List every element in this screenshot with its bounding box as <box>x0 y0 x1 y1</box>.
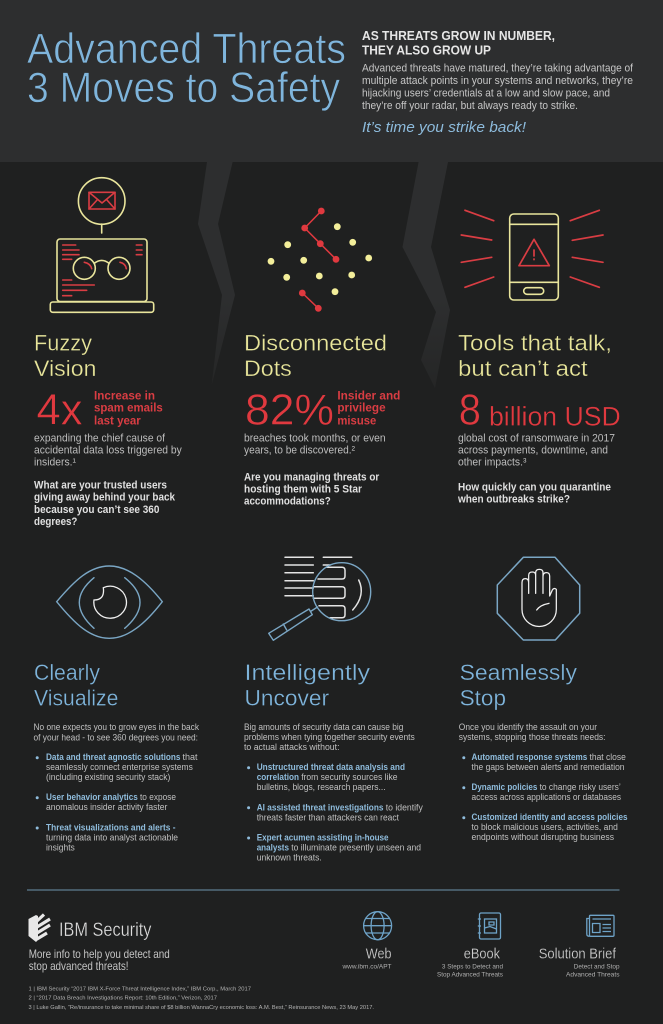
body text: insiders.¹ <box>34 457 76 469</box>
bullet: data and threat agnostic solutions: Data and threat agnostic solutions <box>46 752 180 762</box>
stat: 82%: misuse <box>337 414 377 427</box>
header intro text <box>362 62 634 112</box>
intro text: No one expects you to grow eyes in the back <box>34 722 199 732</box>
stat: 82%: Insider and <box>337 389 400 402</box>
footnotes: 1 | IBM Security “2017 IBM X-Force Threat Intelligence Index,” IBM Corp., March 2017 <box>28 986 251 992</box>
icon: eye <box>57 566 162 638</box>
bullet: automated response systems <box>462 752 626 772</box>
question: Are you managing threats or <box>244 471 380 483</box>
heading: Tools that talk, <box>458 331 612 356</box>
body text: across payments, downtime, and <box>458 445 608 457</box>
header subheading: THEY ALSO GROW UP <box>362 42 491 58</box>
bullet: data and threat agnostic solutions: (including existing security stack) <box>46 772 170 782</box>
question: How quickly can you quarantine <box>458 482 611 494</box>
icon: stop hand in octagon <box>497 557 580 640</box>
header intro text: multiple attack points in your systems and networks, they’re <box>362 75 633 87</box>
body text: accidental data loss triggered by <box>34 445 182 457</box>
bullet: user behavior analytics <box>36 792 176 812</box>
bullet: dynamic policies: to change risky users’ <box>540 782 621 792</box>
panel: disconnected dots <box>244 208 400 508</box>
panel: fuzzy vision <box>34 178 182 528</box>
heading: Stop <box>460 685 506 710</box>
heading: Fuzzy <box>34 331 92 356</box>
heading <box>34 331 96 381</box>
question <box>34 480 176 528</box>
bullet: unstructured threat data analysis: from security sources like <box>301 772 398 782</box>
bullet: threat visualizations and alerts: turning data into analyst actionable <box>46 832 178 842</box>
stat: 8 billion USD: 8 <box>459 385 481 434</box>
heading: Dots <box>244 356 292 381</box>
bullet: dynamic policies: Dynamic policies <box>472 782 537 792</box>
ibm security logo <box>28 914 152 942</box>
heading: Seamlessly <box>460 660 577 685</box>
bullet: customized identity and access policies: endpoints without disrupting business <box>472 832 614 842</box>
bullet: unstructured threat data analysis <box>247 762 405 792</box>
title: Advanced Threats <box>27 26 346 73</box>
body text: global cost of ransomware in 2017 <box>458 432 615 444</box>
question <box>244 471 380 508</box>
icon: globe <box>364 912 392 940</box>
bullet: ai assisted threat investigations: threats faster than attackers can react <box>257 812 399 822</box>
bullet: user behavior analytics: User behavior analytics <box>46 792 138 802</box>
bullet: dynamic policies: access across applications or databases <box>472 792 621 802</box>
bullet: data and threat agnostic solutions: that <box>182 752 198 762</box>
question: degrees? <box>34 516 77 528</box>
footer tagline <box>29 947 170 973</box>
stat: 8 billion USD: billion USD <box>489 402 621 432</box>
footer tagline: More info to help you detect and <box>29 947 170 961</box>
link: solution brief <box>539 915 620 978</box>
bullet: customized identity and access policies: Customized identity and access policies <box>472 812 628 822</box>
header subheading <box>362 28 555 58</box>
panel: tools that talk <box>457 210 621 506</box>
link: ebook: Stop Advanced Threats <box>437 971 504 978</box>
heading <box>460 660 577 710</box>
question: giving away behind your back <box>34 492 176 504</box>
bullet: unstructured threat data analysis: Unstructured threat data analysis and <box>257 762 405 772</box>
bullet: expert acumen <box>247 832 421 862</box>
panel: seamlessly stop <box>459 557 628 842</box>
icon: connected dots <box>268 208 372 312</box>
footnotes <box>28 986 374 1011</box>
heading <box>34 660 118 710</box>
footer tagline: stop advanced threats! <box>29 959 129 973</box>
link: ebook <box>437 913 504 978</box>
bullet: threat visualizations and alerts: insights <box>46 842 75 852</box>
link: web <box>342 912 392 971</box>
bullet: user behavior analytics: to expose <box>140 792 176 802</box>
link: ebook: 3 Steps to Detect and <box>442 964 503 971</box>
bullet: threat visualizations and alerts <box>36 822 178 852</box>
ibm security logo: IBM Security <box>59 920 152 941</box>
intro text: of your head - to see 360 degrees you need: <box>34 732 198 742</box>
link: web: Web <box>366 946 392 963</box>
link: solution brief: Advanced Threats <box>566 971 620 978</box>
bullet: data and threat agnostic solutions <box>36 752 198 782</box>
header panel <box>0 0 663 162</box>
stat: 8 billion USD <box>459 385 621 434</box>
heading: Clearly <box>34 660 100 685</box>
heading: Vision <box>34 356 96 381</box>
heading: Intelligently <box>244 660 370 685</box>
bullet: automated response systems: that close <box>590 752 626 762</box>
heading <box>244 331 387 381</box>
title <box>27 26 346 112</box>
panel: intelligently uncover <box>244 557 423 862</box>
header intro text: Advanced threats have matured, they’re taking advantage of <box>362 62 634 74</box>
call to action: It’s time you strike back! <box>362 119 527 136</box>
body text: breaches took months, or even <box>244 432 386 444</box>
bullet: data and threat agnostic solutions: seamlessly connect enterprise systems <box>46 762 193 772</box>
bullet: expert acumen: unknown threats. <box>257 852 322 862</box>
bullet: expert acumen: Expert acumen assisting in-house <box>257 832 389 842</box>
icon: laptop with glasses and email <box>50 178 154 312</box>
header subheading: AS THREATS GROW IN NUMBER, <box>362 28 555 43</box>
question: hosting them with 5 Star <box>244 483 363 495</box>
bullet: expert acumen: analysts <box>257 842 289 852</box>
icon: phone with alert <box>461 210 603 300</box>
heading: Uncover <box>244 685 329 710</box>
body text <box>458 432 615 469</box>
link: solution brief: Detect and Stop <box>574 964 620 971</box>
icon: magnifying glass over data <box>269 557 371 640</box>
intro text: problems when tying together security events <box>244 732 415 742</box>
link: ebook: eBook <box>464 946 500 963</box>
heading <box>244 660 370 710</box>
intro text: to actual attacks without: <box>244 742 340 752</box>
question <box>457 482 611 506</box>
intro text: systems, stopping those threats needs: <box>459 732 606 742</box>
intro text: Once you identify the assault on your <box>459 722 597 732</box>
question: when outbreaks strike? <box>457 494 570 506</box>
title: 3 Moves to Safety <box>27 65 341 112</box>
intro text <box>34 722 199 742</box>
stat: 82%: privilege <box>337 402 386 415</box>
panel: footer <box>28 912 620 1011</box>
bullet: dynamic policies <box>462 782 621 802</box>
bullet: threat visualizations and alerts: Threat visualizations and alerts - <box>46 822 176 832</box>
question: What are your trusted users <box>34 480 167 492</box>
lightning bolt divider right <box>402 162 450 388</box>
bullet: user behavior analytics: anomalous insider activity faster <box>46 802 167 812</box>
bullet: ai assisted threat investigations <box>247 802 423 822</box>
panel: clearly visualize <box>34 566 199 852</box>
stat: 82% <box>245 385 400 434</box>
icon: newspaper <box>587 915 614 936</box>
heading: Disconnected <box>244 331 387 356</box>
header intro text: they’re off your radar, but always ready to strike. <box>362 100 578 112</box>
body text <box>244 432 386 457</box>
body text: expanding the chief cause of <box>34 432 166 444</box>
stat: 4x: spam emails <box>94 402 163 415</box>
footnotes: 3 | Luke Gallin, “Re/insurance to take minimal share of $8 billion WannaCry economic loss: A.M. Best,” Reinsurance News, 23 May 2017. <box>28 1005 374 1011</box>
bullet: customized identity and access policies <box>462 812 628 842</box>
stat: 4x <box>36 385 163 434</box>
footnotes: 2 | “2017 Data Breach Investigations Report: 10th Edition,” Verizon, 2017 <box>28 996 217 1002</box>
bullet: ai assisted threat investigations: to identify <box>386 802 423 812</box>
bullet: ai assisted threat investigations: AI assisted threat investigations <box>257 802 384 812</box>
stat: 4x: Increase in <box>94 389 155 402</box>
heading: Visualize <box>34 685 118 710</box>
bullet: unstructured threat data analysis: bulletins, blogs, research papers... <box>257 782 386 792</box>
stat: 82%: 82% <box>245 385 334 434</box>
stat: 4x: last year <box>94 414 141 427</box>
bullet: unstructured threat data analysis: correlation <box>257 772 299 782</box>
bullet: expert acumen: to illuminate presently unseen and <box>291 842 421 852</box>
icon: ebook <box>478 913 500 939</box>
bullet: automated response systems: the gaps between alerts and remediation <box>472 762 624 772</box>
bullet: customized identity and access policies: to block malicious users, activities, and <box>472 822 618 832</box>
body text <box>34 432 182 469</box>
intro text <box>459 722 606 742</box>
bullet: automated response systems: Automated response systems <box>472 752 587 762</box>
stat: 4x: 4x <box>36 385 82 434</box>
intro text <box>244 722 415 752</box>
question: because you can’t see 360 <box>34 504 159 516</box>
header intro text: hijacking users’ credentials at a low and slow pace, and <box>362 88 610 100</box>
lightning bolt divider left <box>198 162 235 385</box>
body text: other impacts.³ <box>458 457 527 469</box>
heading: but can’t act <box>458 356 588 381</box>
body text: years, to be discovered.² <box>244 445 355 457</box>
link: solution brief: Solution Brief <box>539 946 617 963</box>
intro text: Big amounts of security data can cause big <box>244 722 403 732</box>
heading <box>458 331 612 381</box>
link: web: www.ibm.co/APT <box>342 964 392 971</box>
question: accommodations? <box>244 496 331 508</box>
